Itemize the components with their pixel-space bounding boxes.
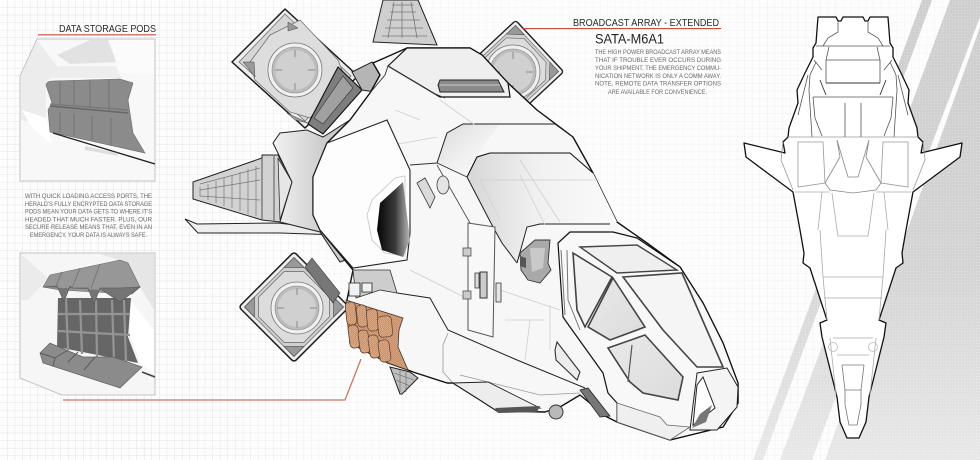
lower belly stub and wheel (453, 382, 563, 419)
text block: broadcast description: ARE AVAILABLE FOR CONVENIENCE. (608, 89, 707, 96)
top view left half (744, 17, 853, 438)
canopy roof pane (580, 245, 677, 273)
chin panel (617, 403, 690, 440)
roof shading (437, 124, 500, 177)
heading: data storage pods: DATA STORAGE PODS (59, 23, 156, 35)
canopy frame details (561, 250, 580, 330)
panel: data storage pods open (20, 253, 155, 395)
leader line: pods callout (63, 359, 361, 400)
cockpit (555, 232, 738, 440)
data storage pods highlighted (345, 300, 408, 370)
chin triangle vent (555, 342, 580, 380)
top view right half (853, 17, 962, 438)
text block: data storage description: HERALD'S FULLY ENCRYPTED DATA STORAGE (25, 201, 152, 208)
side window upper (573, 253, 612, 327)
text block: data storage description: PODS MEAN YOUR DATA GETS TO WHERE IT'S (25, 208, 152, 216)
text block: data storage description: HEADED THAT MUCH FASTER. PLUS, OUR (25, 216, 152, 224)
top fin (373, 0, 437, 45)
text block: broadcast description: YOUR SHIPMENT, THE EMERGENCY COMMU- (595, 65, 721, 72)
lower wing (185, 219, 340, 235)
left fin (193, 155, 292, 222)
ship: main isometric view (185, 0, 738, 440)
upper left pod (232, 9, 362, 134)
side window middle (588, 278, 645, 340)
side sensor pod (520, 240, 551, 283)
text block: broadcast description: NICATION NETWORK IS ONLY A COMM AWAY. (595, 73, 721, 80)
side window lower (608, 335, 683, 400)
text block: data storage description (25, 193, 152, 239)
top plate (388, 48, 510, 97)
fuselage louver (417, 176, 449, 208)
text block: broadcast description: NOTE, REMOTE DATA TRANSFER OPTIONS (595, 80, 721, 88)
upper right pod (464, 20, 564, 120)
nose (690, 368, 738, 430)
belly fin (390, 367, 418, 394)
diagonal binary bands (753, 0, 980, 460)
panel: data storage pods closed (20, 39, 155, 181)
model title: SATA-M6A1 (595, 30, 664, 46)
ship: top view line drawing (744, 17, 962, 438)
forward belly vent (580, 388, 610, 417)
canopy top pane (623, 273, 723, 367)
rear engine housing (273, 93, 400, 262)
text block: broadcast description: THE HIGH POWER BROADCAST ARRAY MEANS (595, 49, 721, 56)
text block: broadcast description: THAT IF TROUBLE EVER OCCURS DURING (595, 57, 721, 64)
text block: data storage description: EMERGENCY, YOUR DATA IS ALWAYS SAFE. (30, 232, 147, 239)
main side panel with intake (313, 120, 410, 268)
top vent (438, 80, 504, 92)
side hatch door (463, 223, 501, 337)
text block: data storage description: WITH QUICK LOADING ACCESS PORTS, THE (25, 193, 152, 200)
heading: broadcast array: BROADCAST ARRAY - EXTENDED (573, 17, 719, 29)
roof shading lower (467, 153, 617, 263)
body silhouette (313, 48, 738, 440)
lower body sections (349, 270, 585, 395)
lower left pod (239, 252, 349, 362)
text block: broadcast description (595, 49, 721, 96)
text block: data storage description: SECURE RELEASE MEANS THAT, EVEN IN AN (25, 224, 152, 231)
connector strut (352, 62, 390, 92)
body seams (370, 66, 610, 360)
